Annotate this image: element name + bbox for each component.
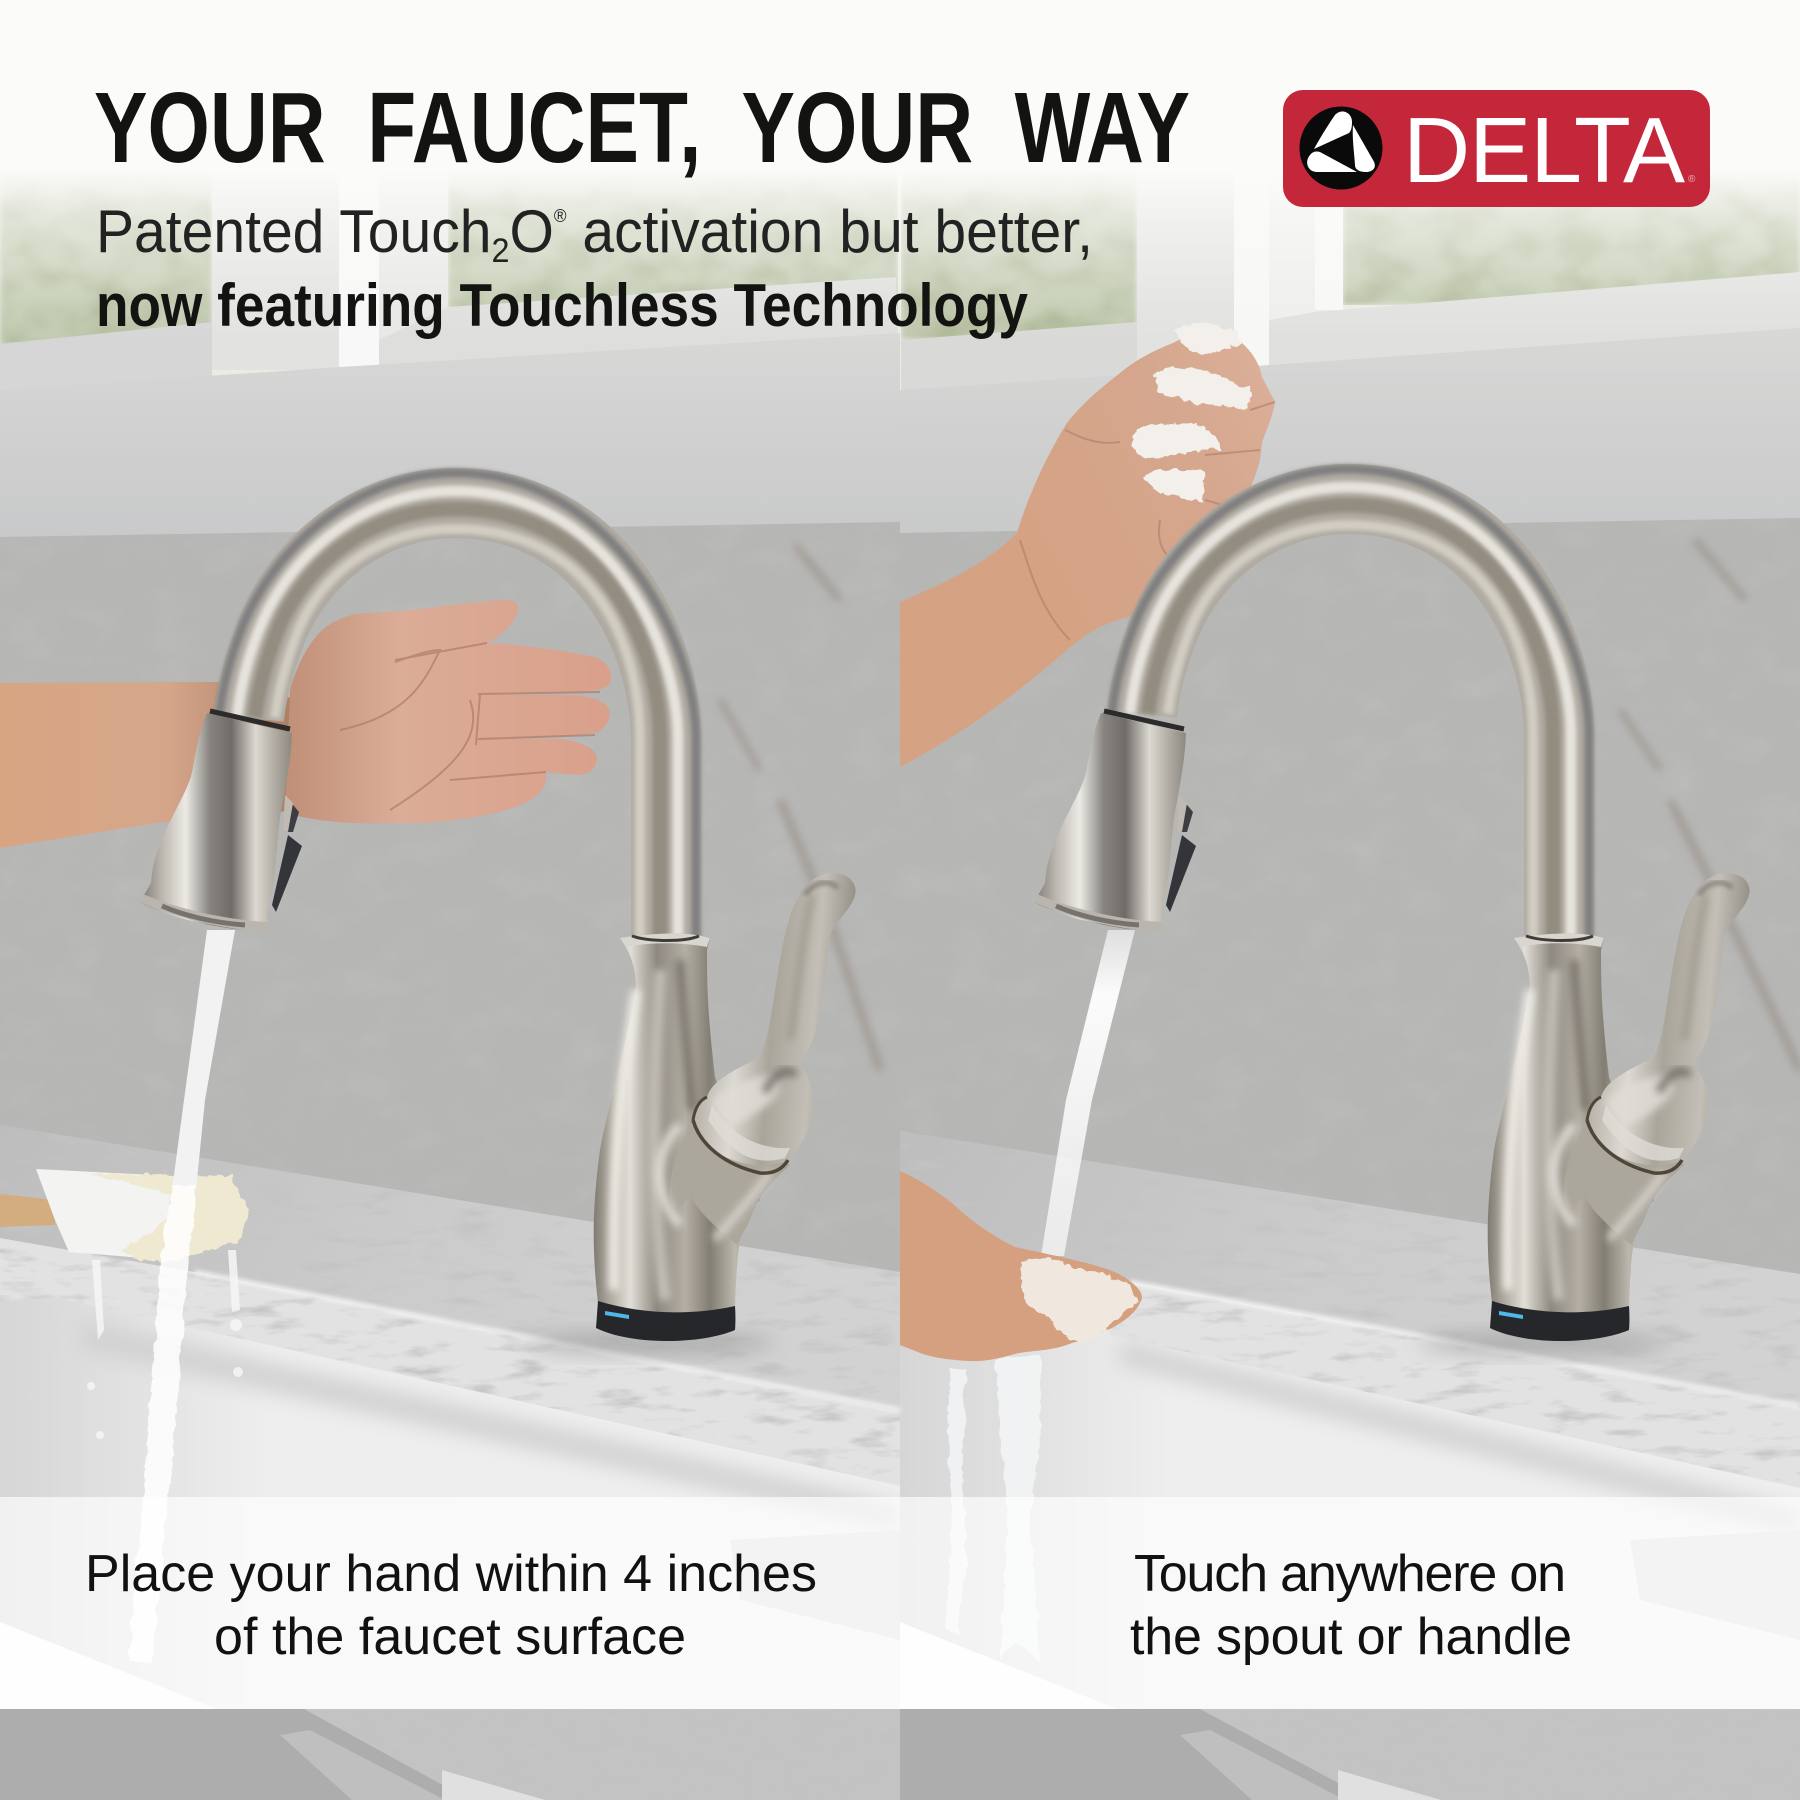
water stream right xyxy=(1041,930,1135,1256)
sink rim left xyxy=(0,1622,356,1800)
batter xyxy=(90,1172,248,1261)
caption band right xyxy=(900,1497,1800,1709)
window scene with trees xyxy=(0,0,1800,400)
hand creases xyxy=(1020,402,1275,640)
caption left: of the faucet surface xyxy=(214,1608,686,1666)
caption right: the spout or handle xyxy=(1130,1608,1572,1666)
fade to white at top xyxy=(0,0,1800,340)
counter front edge right xyxy=(1100,1277,1800,1488)
countertop right xyxy=(900,1131,1800,1408)
subtitle line 1: ® xyxy=(554,206,566,226)
sink right xyxy=(900,1280,1800,1800)
left scene: hand near faucet xyxy=(0,600,611,1662)
spatula xyxy=(0,1169,248,1261)
countertop left xyxy=(0,1125,900,1412)
soap on fingertips xyxy=(1131,323,1250,502)
ledge wall right xyxy=(900,328,1800,540)
lower hand xyxy=(900,1171,1142,1361)
reflection in sink left xyxy=(730,1530,900,1640)
open hand xyxy=(285,600,611,823)
logo badge xyxy=(1283,90,1710,207)
caption right: Touch anywhere on xyxy=(1134,1545,1566,1603)
logo: Delta xyxy=(1283,90,1710,207)
reflection in sink right xyxy=(1630,1530,1800,1640)
marble backsplash right xyxy=(900,518,1800,1300)
water stream left, smooth upper part xyxy=(172,930,235,1190)
caption left: Place your hand within 4 inches xyxy=(85,1545,817,1603)
marble backsplash left xyxy=(0,522,900,1300)
upper arm and hand xyxy=(900,325,1275,767)
water stream left, broken lower part xyxy=(129,1185,196,1662)
arm left xyxy=(0,682,300,848)
caption left xyxy=(85,1545,817,1666)
counter highlights xyxy=(195,1272,1800,1410)
subtitle line 1: 2 xyxy=(491,232,509,270)
water drips left xyxy=(87,1250,243,1439)
title: YOUR FAUCET, YOUR WAY xyxy=(94,72,1190,184)
faucet shadows xyxy=(525,1333,1669,1353)
subtitle line 2: now featuring Touchless Technology xyxy=(96,272,1029,339)
soap on lower hand xyxy=(1020,1258,1138,1340)
window sills xyxy=(0,272,1800,400)
gap left xyxy=(442,1770,545,1800)
counter front edge left xyxy=(0,1238,900,1486)
sink rim bevel right xyxy=(1180,1730,1345,1800)
sink left xyxy=(0,1280,900,1800)
gap right xyxy=(1338,1770,1441,1800)
caption band left xyxy=(0,1497,900,1709)
subtitle line 1: activation but better, xyxy=(566,198,1093,265)
under-counter shadow xyxy=(80,1320,1800,1535)
marble slab right xyxy=(1200,1709,1800,1800)
logo mark xyxy=(1300,106,1382,190)
left faucet xyxy=(140,473,856,1341)
logo wordmark: DELTA xyxy=(1403,98,1685,202)
backsplash veins xyxy=(720,540,1800,1070)
bottom band xyxy=(0,1709,1800,1800)
subtitle line 1: O xyxy=(509,198,554,265)
ledge wall left xyxy=(0,333,900,540)
subtitle line 1: Patented Touch xyxy=(96,198,512,265)
registered mark: ® xyxy=(1688,174,1696,185)
falling water right xyxy=(946,1355,1040,1662)
sink rim bevel left xyxy=(280,1730,445,1800)
spatula blade xyxy=(36,1169,180,1261)
palm creases and finger gaps xyxy=(340,643,600,810)
right faucet xyxy=(1034,469,1750,1341)
sink rim right xyxy=(900,1622,1256,1800)
wood handle xyxy=(0,1194,55,1227)
right scene: soapy hands xyxy=(900,323,1275,1662)
marble slab left xyxy=(304,1709,900,1800)
caption right xyxy=(1130,1545,1572,1666)
